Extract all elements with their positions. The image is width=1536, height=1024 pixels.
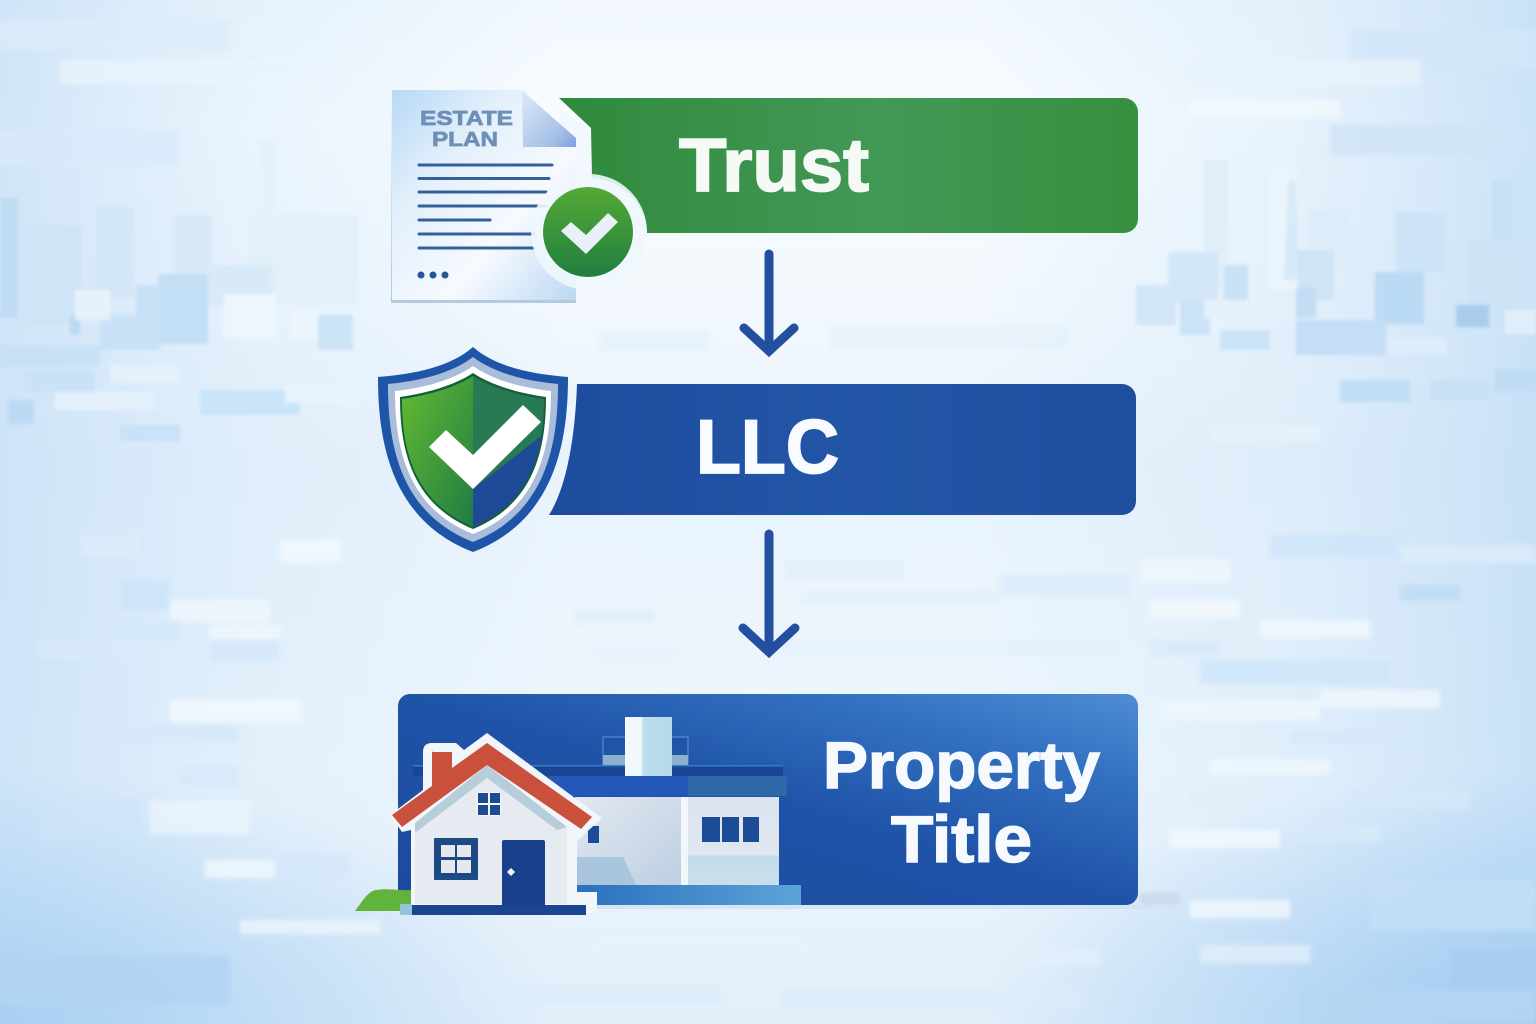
- panel: LLC bar: [549, 384, 1136, 515]
- heading: Property Title: [823, 728, 1100, 876]
- top cloud bands: [0, 20, 1536, 166]
- document title: PLAN: [432, 129, 498, 151]
- document title: [420, 108, 513, 151]
- document title: ESTATE: [420, 108, 513, 130]
- cloud blocks: [0, 325, 1536, 1024]
- icon: estate plan document: [391, 84, 591, 303]
- document dots: [418, 272, 448, 278]
- attic window: [477, 792, 501, 816]
- icon: green check badge: [531, 174, 647, 290]
- heading: LLC: LLC: [696, 405, 839, 490]
- panel: Property Title: [398, 694, 1138, 905]
- arrow: Trust to LLC: [744, 254, 794, 351]
- heading: Property Title: Property: [823, 728, 1100, 802]
- front window: [434, 838, 478, 880]
- document text lines: [419, 165, 552, 248]
- arrow: LLC to Property Title: [743, 534, 795, 652]
- icon: small house: [355, 733, 602, 915]
- panel: Trust bar: [559, 98, 1138, 233]
- heading: Property Title: Title: [891, 802, 1032, 876]
- icon: large building behind house: [413, 717, 1157, 909]
- right skyline: [1136, 160, 1536, 441]
- left skyline: [0, 140, 360, 441]
- heading: Trust: Trust: [679, 123, 869, 207]
- icon: shield with check: [378, 347, 568, 552]
- door: [502, 840, 545, 905]
